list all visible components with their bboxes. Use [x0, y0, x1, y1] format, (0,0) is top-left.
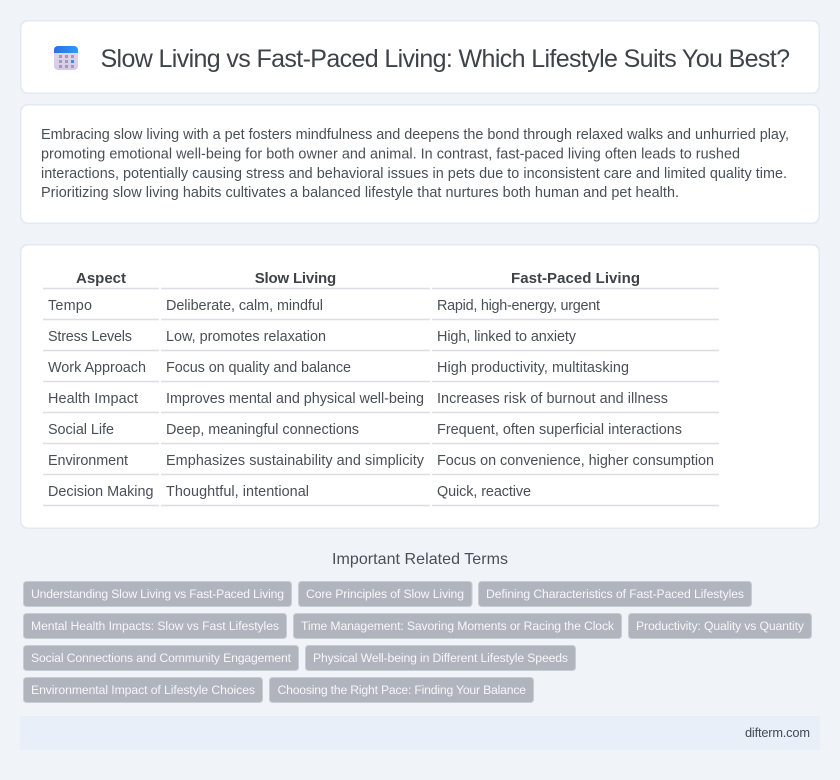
row: Stress Levels: High, linked to anxiety — [437, 329, 577, 345]
tag — [24, 582, 292, 606]
tag — [294, 614, 622, 638]
row: Tempo — [48, 298, 600, 314]
tag — [24, 646, 298, 670]
row: Decision Making: Decision Making — [48, 484, 154, 500]
tag: Understanding Slow Living vs Fast-Paced Living — [31, 587, 284, 601]
row: Work Approach: Focus on quality and balance — [166, 360, 351, 376]
row: Stress Levels: Stress Levels — [48, 329, 132, 345]
related term tags — [24, 582, 812, 702]
row: Environment — [48, 453, 714, 469]
row: Stress Levels: Low, promotes relaxation — [166, 329, 326, 345]
row: Social Life: Social Life — [48, 422, 114, 438]
row: Decision Making — [48, 484, 531, 500]
row: Decision Making: Quick, reactive — [437, 484, 531, 500]
title: Slow Living vs Fast-Paced Living: Which Lifestyle Suits You Best? — [100, 45, 790, 73]
row: Environment: Focus on convenience, higher consumption — [437, 453, 714, 469]
row: Environment: Environment — [48, 453, 128, 469]
tag — [298, 582, 472, 606]
row: Tempo: Tempo — [48, 298, 92, 314]
row: Stress Levels — [48, 329, 577, 345]
panel: description — [21, 105, 819, 223]
row: Health Impact: Increases risk of burnout and illness — [437, 391, 668, 407]
description text: interactions, potentially causing stress and behavioral issues in pets due to inconsistent care and limited quality time. — [41, 166, 787, 182]
description text: Prioritizing slow living habits cultivates a balanced lifestyle that nurtures both human and pet health. — [41, 185, 679, 201]
panel: comparison table — [21, 245, 819, 528]
table header — [76, 270, 640, 287]
tag: Time Management: Savoring Moments or Racing the Clock — [301, 619, 615, 633]
tag: Choosing the Right Pace: Finding Your Balance — [278, 683, 526, 697]
row: Social Life: Deep, meaningful connections — [166, 422, 359, 438]
description text: promoting emotional well-being for both owner and animal. In contrast, fast-paced living often leads to rushed — [41, 146, 740, 162]
panel: title header — [21, 21, 819, 93]
tag: Productivity: Quality vs Quantity — [636, 619, 805, 633]
tag — [478, 582, 752, 606]
tag: Social Connections and Community Engagement — [31, 651, 292, 665]
row: Health Impact: Health Impact — [48, 391, 138, 407]
footer — [20, 716, 820, 750]
tag: Mental Health Impacts: Slow vs Fast Lifestyles — [31, 619, 279, 633]
tag: Environmental Impact of Lifestyle Choices — [31, 683, 255, 697]
row: Social Life — [48, 422, 682, 438]
tag — [24, 678, 262, 702]
footer source text: difterm.com — [745, 725, 810, 740]
row: Health Impact — [48, 391, 668, 407]
row: Tempo: Deliberate, calm, mindful — [166, 298, 323, 314]
row: Health Impact: Improves mental and physical well-being — [166, 391, 424, 407]
table header: Slow Living — [255, 270, 336, 287]
tag — [270, 678, 534, 702]
tag — [306, 646, 576, 670]
tag: Defining Characteristics of Fast-Paced Lifestyles — [486, 587, 744, 601]
row: Tempo: Rapid, high-energy, urgent — [437, 298, 600, 314]
row: Work Approach: Work Approach — [48, 360, 146, 376]
row: Environment: Emphasizes sustainability and simplicity — [166, 453, 425, 469]
table header: Fast-Paced Living — [511, 270, 640, 287]
tag — [24, 614, 286, 638]
description text: Embracing slow living with a pet fosters mindfulness and deepens the bond through relaxed walks and unhurried play, — [41, 127, 789, 143]
row: Work Approach: High productivity, multitasking — [437, 360, 629, 376]
table header: Aspect — [76, 270, 126, 287]
description text — [41, 127, 789, 201]
tag: Core Principles of Slow Living — [306, 587, 464, 601]
row: Work Approach — [48, 360, 629, 376]
tag — [628, 614, 812, 638]
icon: calendar — [54, 46, 78, 70]
tag: Physical Well-being in Different Lifestyle Speeds — [313, 651, 568, 665]
heading: related terms: Important Related Terms — [332, 551, 508, 568]
row: Social Life: Frequent, often superficial interactions — [437, 422, 682, 438]
row: Decision Making: Thoughtful, intentional — [166, 484, 309, 500]
